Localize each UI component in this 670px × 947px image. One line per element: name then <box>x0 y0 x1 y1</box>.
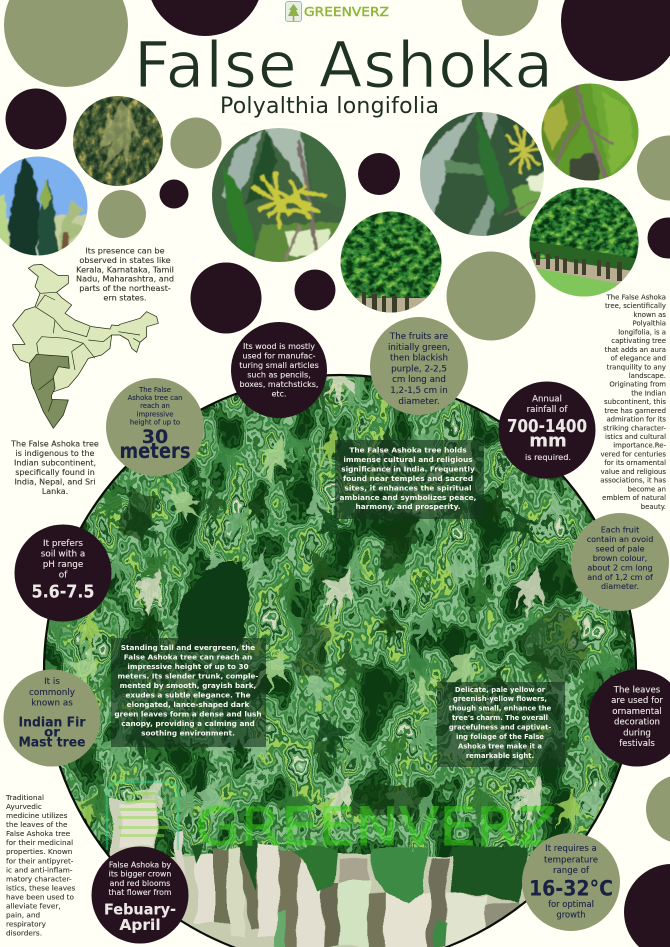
callout: flowering period <box>92 846 188 944</box>
callout: festival use: decoration <box>614 718 660 728</box>
callout: height 30 meters: 30 <box>142 426 168 448</box>
text: introduction: Originating from <box>609 381 666 389</box>
panel: tree description <box>111 638 266 747</box>
text: ayurvedic medicine: disorders. <box>6 929 42 938</box>
panel: tree description: exudes a subtle elegance. The <box>125 690 251 700</box>
panel: cultural significance: immense cultural and religious <box>343 455 473 464</box>
panel: flowers description: Ashoka tree make it a <box>458 742 542 750</box>
text: states: observed in states like <box>79 255 171 265</box>
text: indigenous: Indian subcontinent, <box>14 458 96 468</box>
callout: height 30 meters: height of up to <box>130 418 180 426</box>
text: ayurvedic medicine: medicine utilizes <box>6 811 68 820</box>
callout: fruits: initially green, <box>388 343 450 353</box>
text: ayurvedic medicine: ic and anti-inflam- <box>6 865 73 874</box>
text: ayurvedic medicine: for their antipyret- <box>6 856 74 865</box>
text: ayurvedic medicine: istics, these leaves <box>6 883 76 892</box>
callout: common names <box>4 670 100 766</box>
logo wordmark: GREENVERZ <box>304 5 389 19</box>
callout: height 30 meters: The False <box>138 386 171 394</box>
callout: soil pH: It prefers <box>43 539 83 549</box>
callout: soil pH: of <box>59 570 68 580</box>
callout: wood uses: boxes, matchsticks, <box>240 380 318 389</box>
text: introduction: admiration for its <box>606 416 666 424</box>
text: introduction: emblem of natural <box>602 494 666 502</box>
callout: temperature <box>522 833 620 931</box>
callout: wood uses: such as pencils, <box>247 371 311 380</box>
callout: wood uses: used for manufac- <box>242 352 316 361</box>
text: introduction: tree, scientifically <box>605 302 666 310</box>
photo: foliage with olive leaves <box>73 96 163 186</box>
callout: fruits: 1,2-1,5 cm in <box>390 386 448 396</box>
callout: seed: seed of pale <box>595 544 645 553</box>
panel: flowers description: tree's charm. The overall <box>452 714 548 722</box>
callout: festival use: ornamental <box>612 707 662 717</box>
panel: flowers description: Delicate, pale yellow or <box>455 686 546 694</box>
callout: seed: about 2 cm long <box>587 563 653 572</box>
circle outline <box>44 375 636 947</box>
callout: height 30 meters <box>106 378 204 476</box>
text: ayurvedic medicine: properties. Known <box>6 847 72 856</box>
text: introduction: landscape. <box>629 372 666 380</box>
text: introduction: tranquility to any <box>607 363 666 371</box>
callout: fruits: diameter. <box>398 397 440 407</box>
text: introduction: for its ornamental <box>604 459 666 467</box>
text: indigenous: is indigenous to the <box>16 449 95 458</box>
logo <box>286 2 389 22</box>
callout: soil pH <box>14 524 112 622</box>
text: introduction: Polyalthia <box>633 320 666 328</box>
callout: fruits: then blackish <box>390 354 448 364</box>
photo: hedge of green foliage <box>340 210 442 314</box>
panel: tree description: False Ashoka tree can reach an <box>124 652 252 662</box>
callout: wood uses <box>231 322 327 418</box>
callout: soil pH: soil with a <box>41 550 85 560</box>
text: indigenous: Lanka. <box>42 487 68 496</box>
text: introduction: become an <box>628 485 666 493</box>
callout: common names: known as <box>31 698 73 708</box>
callout: rainfall <box>498 382 596 478</box>
callout: fruits <box>370 317 468 415</box>
text: ayurvedic medicine: have been used to <box>6 892 75 901</box>
text: introduction: The False Ashoka <box>606 294 666 302</box>
dark canopy shadows <box>118 490 590 815</box>
panel: tree description: elongated, lance-shaped dark <box>127 700 249 709</box>
panel: cultural significance: significance in India. Frequently <box>341 464 475 473</box>
callout: wood uses: etc. <box>272 390 286 399</box>
text: ayurvedic medicine: respiratory <box>6 920 47 929</box>
callout: festival use: festivals <box>619 739 655 749</box>
panel: cultural significance: harmony, and prosperity. <box>355 502 461 511</box>
text: ayurvedic medicine: the leaves of the <box>6 820 68 829</box>
text: ayurvedic medicine: False Ashoka tree <box>6 829 71 838</box>
callout: flowering period: April <box>119 916 161 934</box>
photo: long leaves <box>420 112 544 236</box>
icon: tree logo <box>286 2 302 22</box>
panel: cultural significance: The False Ashoka tree holds <box>349 446 467 454</box>
callout: height 30 meters: meters <box>120 439 190 463</box>
callout: fruits: purple, 2-2,5 <box>391 364 447 374</box>
callout: temperature: temperature <box>544 856 598 866</box>
panel: flowers description <box>437 682 565 767</box>
callout: soil pH: 5.6-7.5 <box>32 583 94 603</box>
panel: flowers description: ing foliage of the False <box>456 733 544 741</box>
callout: height 30 meters: reach an <box>140 402 170 410</box>
watermark wordmark: GREENVERZ <box>195 797 557 858</box>
text: states: Its presence can be <box>85 246 165 256</box>
panel: tree description: canopy, providing a calming and <box>121 719 255 728</box>
panel: tree description: mented by smooth, grayish bark, <box>120 681 257 690</box>
text: indigenous: The False Ashoka tree <box>10 440 99 448</box>
panel: flowers description: remarkable sight. <box>466 752 534 760</box>
callout: common names: It is <box>44 677 60 687</box>
callout: flowering period: and red blooms <box>110 879 170 888</box>
callout: festival use: are used for <box>611 696 663 706</box>
callout: seed: Each fruit <box>601 526 639 534</box>
text: ayurvedic medicine: for their medicinal <box>6 838 73 847</box>
callout: seed: contain an ovoid <box>587 535 653 544</box>
text: introduction: striking character- <box>603 424 667 432</box>
callout: rainfall: mm <box>529 431 567 452</box>
text: introduction: tree has garnered <box>604 407 666 415</box>
callout: temperature: range of <box>553 866 590 876</box>
text: introduction: that adds an aura <box>605 346 666 354</box>
photo: row of trees on grass <box>528 187 640 300</box>
text: introduction: longifolia, is a <box>618 328 666 336</box>
text: introduction: importance.Re- <box>613 442 667 450</box>
text: introduction: istics and cultural <box>605 433 666 441</box>
text: introduction: of elegance and <box>611 354 666 362</box>
text: ayurvedic medicine: Traditional <box>5 793 44 802</box>
callout: fruits: The fruits are <box>389 332 448 342</box>
callout: flowering period: Febuary- <box>104 900 176 918</box>
panel: cultural significance <box>335 440 484 519</box>
tree trunks <box>109 798 530 947</box>
callout: festival use: during <box>623 728 651 738</box>
callout: height 30 meters: impressive <box>137 410 173 418</box>
text: ayurvedic medicine: alleviate fever, <box>6 902 61 910</box>
callout: height 30 meters: Ashoka tree can <box>128 394 182 402</box>
text: states: parts of the northeast- <box>79 283 171 293</box>
watermark icon <box>107 782 178 850</box>
callout: soil pH: pH range <box>43 560 83 570</box>
subtitle: Polyalthia longifolia <box>220 94 439 119</box>
text: ayurvedic medicine: Ayurvedic <box>6 802 42 811</box>
callout: rainfall: rainfall of <box>527 405 568 415</box>
panel: tree description: Standing tall and evergreen, the <box>121 643 255 652</box>
callout: rainfall: Annual <box>532 394 562 404</box>
text: introduction: associations, it has <box>600 477 666 485</box>
panel: tree canopy illustration <box>30 360 650 947</box>
callout: festival use: The leaves <box>613 686 661 696</box>
text: states: Nadu, Maharashtra, and <box>76 274 174 284</box>
callout: flowering period: False Ashoka by <box>109 860 172 869</box>
callout: seed: brown colour, <box>593 554 647 563</box>
panel: tree description: green leaves form a dense and lush <box>114 710 262 718</box>
callout: common names: Indian Fir <box>18 715 86 731</box>
callout: common names: or <box>44 724 60 740</box>
map: India <box>13 264 158 428</box>
panel: flowers description: greenish-yellow flowers, <box>453 695 547 703</box>
panel: cultural significance: ambiance and symbolizes peace, <box>340 493 477 502</box>
callout: seed <box>571 513 669 611</box>
callout: seed: diameter. <box>601 582 639 591</box>
callout: common names: Mast tree <box>18 735 86 751</box>
text: ayurvedic medicine: matory character- <box>6 874 72 883</box>
photo: branch and green leaves <box>542 84 638 180</box>
text: introduction: value and religious <box>601 468 666 476</box>
callout: temperature: It requires a <box>545 844 597 854</box>
panel: cultural significance: found near temples and sacred <box>343 474 473 483</box>
callout: flowering period: its bigger crown <box>109 870 171 879</box>
watermark logo <box>107 782 557 858</box>
panel: tree description: impressive height of up to 30 <box>127 662 249 671</box>
callout: fruits: cm long and <box>392 375 446 385</box>
callout: temperature: growth <box>556 910 586 920</box>
callout: wood uses: Its wood is mostly <box>243 342 315 351</box>
callout: seed: and of 1,2 cm of <box>587 573 653 582</box>
text: states: ern states. <box>103 292 147 302</box>
panel: tree description: meters. Its slender trunk, comple- <box>118 672 258 680</box>
text: indigenous: specifically found in <box>15 468 95 477</box>
text: introduction: beauty. <box>641 503 666 511</box>
photo: trees against blue sky <box>0 156 88 256</box>
callout: rainfall: is required. <box>525 452 571 462</box>
callout: festival use <box>588 670 670 766</box>
title: False Ashoka <box>134 29 553 102</box>
panel: cultural significance: sites, it enhances the spiritual <box>344 483 472 492</box>
text: ayurvedic medicine: pain, and <box>6 910 40 920</box>
text: introduction: known as <box>633 311 666 319</box>
panel: flowers description: though small, enhance the <box>449 705 552 713</box>
callout: common names: commonly <box>29 688 75 698</box>
text: introduction: the Indian <box>631 389 666 397</box>
panel: tree description: soothing environment. <box>141 728 235 738</box>
callout: rainfall: 700-1400 <box>507 416 587 437</box>
text: introduction: subcontinent, this <box>604 398 666 406</box>
text: indigenous: India, Nepal, and Sri <box>14 478 96 486</box>
callout: temperature: for optimal <box>548 899 594 909</box>
photo: yellow flowers and leaves <box>212 128 346 262</box>
callout: flowering period: that flower from <box>108 888 172 897</box>
callout: temperature: 16-32°C <box>529 877 613 901</box>
text: introduction: captivating tree <box>611 337 666 345</box>
callout: wood uses: turing small articles <box>239 361 319 370</box>
text: states: Kerala, Karnataka, Tamil <box>76 264 174 274</box>
text: introduction: vered for centuries <box>600 450 666 458</box>
panel: flowers description: gracefulness and captivat- <box>449 724 551 732</box>
